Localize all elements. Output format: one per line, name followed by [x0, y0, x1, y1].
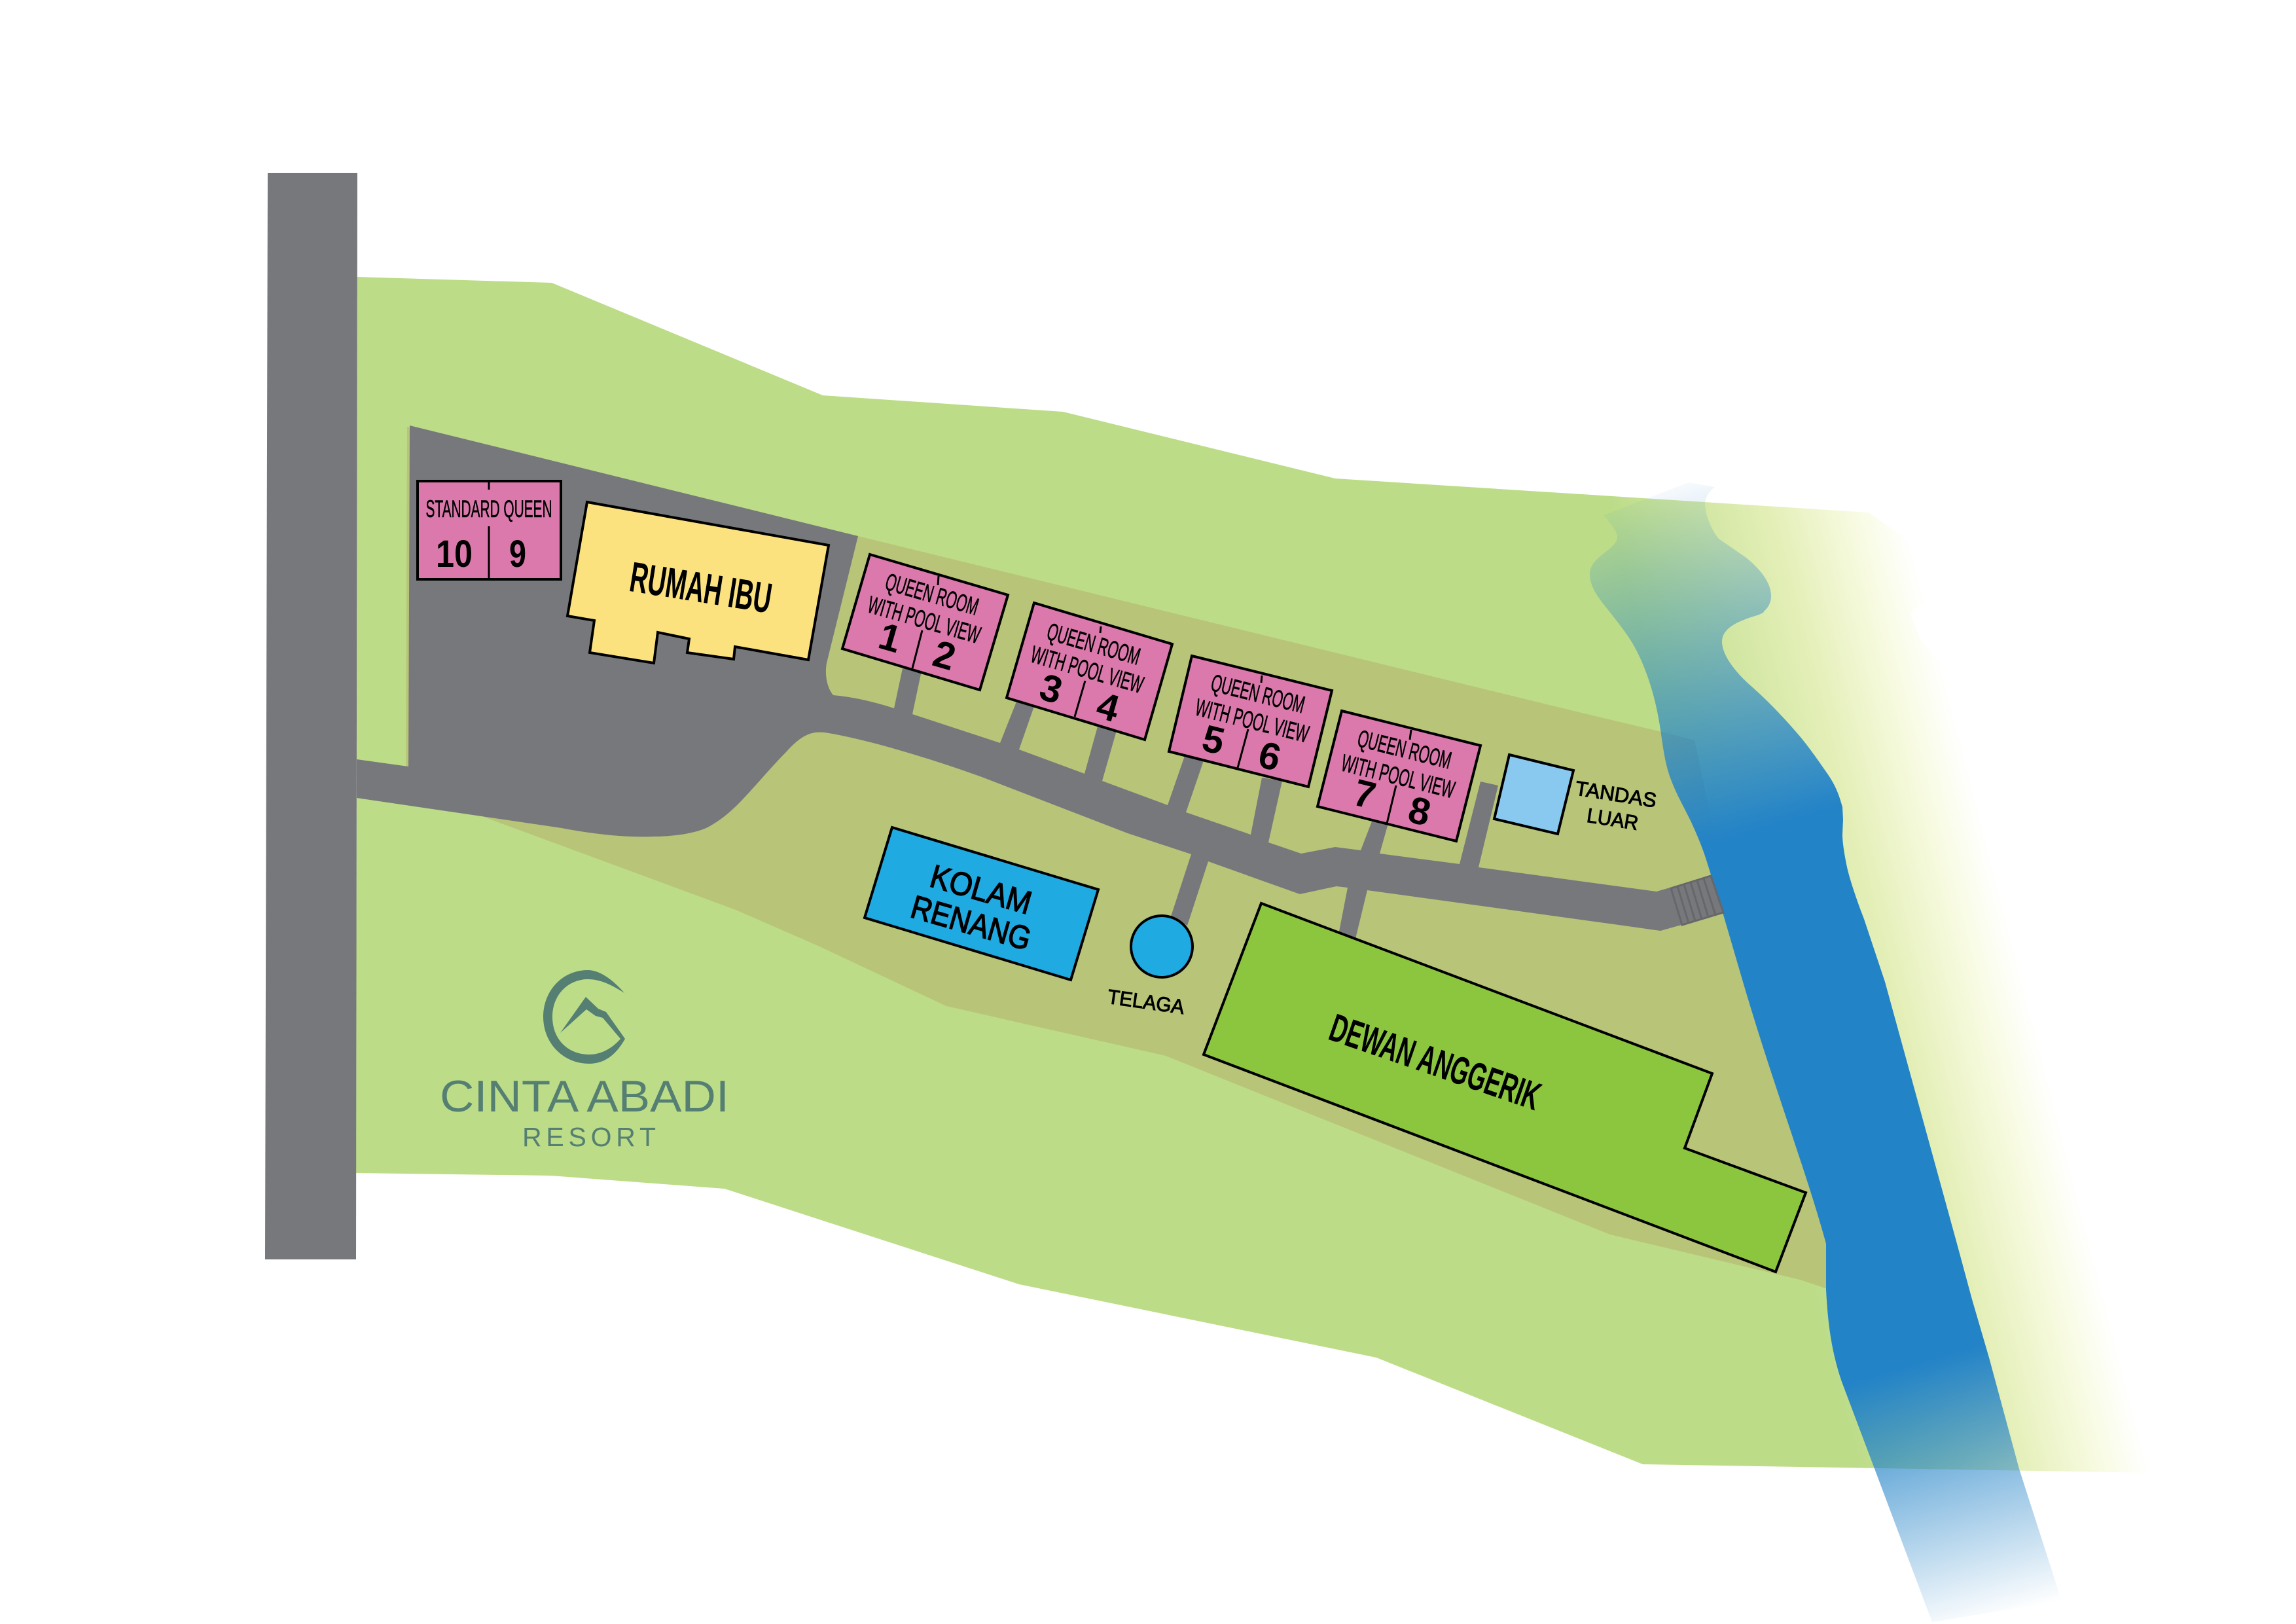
- land: developed tan area: [406, 427, 1839, 1293]
- building: queen rooms 7 and 8: [1318, 711, 1480, 841]
- label: queen room: QUEEN ROOM: [1208, 669, 1308, 719]
- building: queen rooms 3 and 4: [1007, 603, 1172, 740]
- room number 3: 3: [1035, 666, 1067, 712]
- building: queen rooms 1 and 2: [842, 554, 1008, 690]
- steps to river: [1671, 876, 1723, 925]
- swimming pool: [865, 827, 1098, 980]
- logo subtitle: RESORT: [522, 1122, 656, 1152]
- label: Tandas Luar: TANDAS: [1573, 776, 1658, 812]
- label: queen room: QUEEN ROOM: [1044, 618, 1143, 670]
- label: Tandas Luar: LUAR: [1585, 804, 1640, 835]
- logo ring: [543, 970, 625, 1064]
- label: Renang: RENANG: [907, 888, 1035, 958]
- vertical main road: [265, 173, 357, 1259]
- room number 2: 2: [928, 632, 960, 679]
- land: green grounds: [356, 277, 2153, 1473]
- label: with pool view: WITH POOL VIEW: [865, 591, 984, 649]
- label: Tandas Luar: [1573, 776, 1658, 835]
- label: with pool view: WITH POOL VIEW: [1028, 641, 1147, 698]
- internal road and car park: [357, 425, 1723, 939]
- label: queen room: QUEEN ROOM: [1355, 725, 1454, 774]
- building: Dewan Anggerik: [1204, 903, 1806, 1272]
- label: Rumah Ibu: RUMAH IBU: [627, 552, 775, 623]
- room number 5: 5: [1198, 717, 1229, 763]
- building: standard queen rooms 10 and 9: [418, 481, 561, 579]
- label: with pool view: WITH POOL VIEW: [1193, 694, 1312, 748]
- logo: Cinta Abadi Resort: [440, 970, 729, 1152]
- building: outdoor toilet: [1494, 755, 1573, 834]
- label: standard queen: STANDARD QUEEN: [425, 496, 552, 522]
- logo mountain: [560, 997, 625, 1039]
- label: Telaga: TELAGA: [1106, 985, 1186, 1019]
- room number 7: 7: [1349, 771, 1380, 818]
- room number 1: 1: [874, 615, 906, 661]
- room number 4: 4: [1092, 684, 1124, 731]
- room number 10: 10: [436, 533, 473, 575]
- label: Dewan Anggerik: DEWAN ANGGERIK: [1324, 1005, 1547, 1119]
- logo name: CINTA ABADI: [440, 1072, 729, 1121]
- room number 6: 6: [1254, 733, 1285, 780]
- room number 8: 8: [1404, 788, 1435, 835]
- room number 9: 9: [509, 533, 526, 575]
- building: Rumah Ibu: [567, 502, 829, 663]
- label: Kolam: KOLAM: [926, 857, 1035, 922]
- label: queen room: QUEEN ROOM: [882, 568, 982, 621]
- pond: [1131, 916, 1193, 977]
- label: with pool view: WITH POOL VIEW: [1338, 749, 1458, 803]
- building: queen rooms 5 and 6: [1169, 656, 1332, 787]
- river: [1590, 482, 2062, 1622]
